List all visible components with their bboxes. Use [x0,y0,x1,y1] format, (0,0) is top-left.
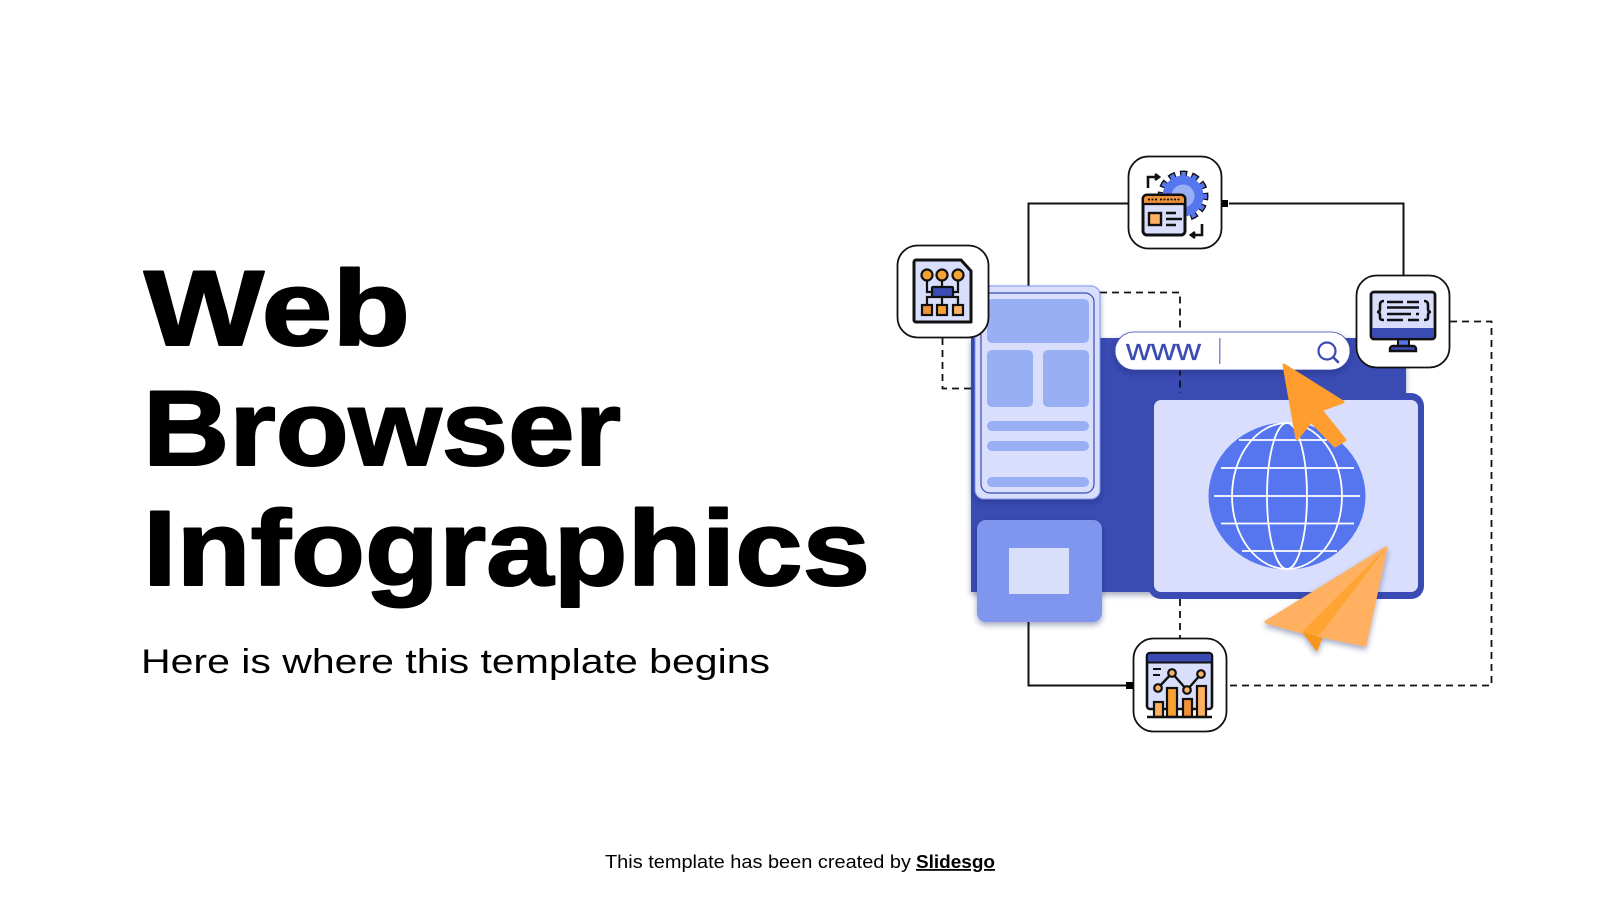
title: Browser [143,368,621,488]
phone wireframe [975,286,1100,499]
globe [1208,422,1366,570]
search bar: www [1125,332,1202,367]
icon tile: gear window [1128,156,1222,248]
title [143,248,870,608]
icon tile: chart dashboard [1126,638,1226,732]
footer credit: Slidesgo [916,852,995,872]
connector: dashed left [942,338,972,388]
connector: dashed centre [1100,292,1180,638]
title: Web [144,248,410,368]
connector: solid bottom [1028,622,1127,686]
connector: dashed right [1227,322,1492,686]
paper plane [1266,548,1386,652]
connector: solid top [1028,200,1404,286]
icon tile: code monitor [1356,276,1450,368]
footer credit: This template has been created by [605,852,911,872]
search bar [1115,332,1350,370]
image card [977,520,1102,622]
browser base [971,338,1406,592]
subtitle: Here is where this template begins [141,643,770,681]
browser illustration [971,286,1424,652]
title: Infographics [143,488,870,608]
cursor arrow [1284,365,1345,446]
browser window [1148,393,1424,599]
icon tile: flowchart document [898,246,988,338]
